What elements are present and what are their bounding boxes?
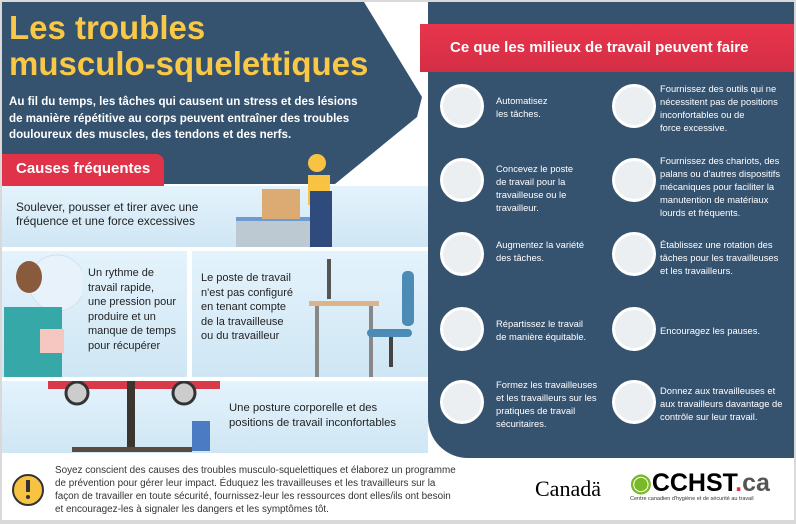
- cause 4 panel: positions de travail inconfortables: [229, 417, 396, 429]
- item: automatisez: Automatisez: [496, 95, 548, 106]
- cause 4 panel: [2, 381, 428, 453]
- cause 2 panel: pour récupérer: [88, 340, 160, 352]
- item: variete: Augmentez la variété: [496, 239, 584, 250]
- title: musculo-squelettiques: [9, 45, 368, 82]
- item: outils: Fournissez des outils qui ne: [660, 83, 776, 94]
- cause 1 panel: [2, 186, 428, 247]
- item: outils: nécessitent pas de positions: [660, 96, 778, 107]
- cause 1 panel: fréquence et une force excessives: [16, 214, 195, 228]
- illustration: worker with box: [236, 154, 332, 247]
- red banner: Ce que les milieux: [420, 24, 794, 72]
- cause 3 panel: [192, 251, 428, 377]
- logo: Canada: Canadä: [535, 476, 601, 501]
- cause 1 panel: Soulever, pousser et tirer avec une: [16, 200, 198, 214]
- footer text: façon de travailler en toute sécurité, fournissez-leur les ressources dont elles/ils ont besoin: [55, 491, 451, 502]
- action items: travailleur.: [496, 202, 539, 213]
- item: automatisez: les tâches.: [496, 108, 541, 119]
- item: repartissez: de manière équitable.: [496, 331, 586, 342]
- right dark panel: [428, 2, 794, 458]
- intro text: douloureux des muscles, des tendons et des nerfs.: [9, 128, 291, 141]
- footer text: et encouragez-les à signaler les dangers et les symptômes tôt.: [55, 504, 329, 515]
- cause 3 panel: en tenant compte: [201, 301, 286, 313]
- item: repartissez: Répartissez le travail: [496, 318, 583, 329]
- intro text: [9, 95, 358, 141]
- icon: warning bubble: [12, 474, 44, 506]
- cause 2 panel: manque de temps: [88, 325, 176, 337]
- logo: CCHST: Centre canadien d'hygiène et de sécurité au travail: [630, 496, 754, 502]
- causes heading: Causes fréquentes: [16, 160, 150, 177]
- item: outils: inconfortables ou de: [660, 109, 744, 120]
- cause 2 panel: produire et un: [88, 310, 156, 322]
- item: controle: contrôle sur leur travail.: [660, 411, 757, 422]
- cause 3 panel: de la travailleuse: [201, 316, 284, 328]
- item: poste: Concevez le poste: [496, 163, 573, 174]
- item: variete: [440, 232, 584, 276]
- illustration: desk: [309, 259, 414, 377]
- cause 3 panel: n'est pas configuré: [201, 286, 293, 298]
- item: outils: [612, 83, 778, 133]
- action items: lourds et fréquents.: [660, 207, 740, 218]
- cause 2 panel: [2, 251, 187, 377]
- cause 2 panel: une pression pour: [88, 296, 176, 308]
- item: poste: [440, 158, 573, 213]
- item: rotation: Établissez une rotation des: [660, 239, 773, 250]
- item: poste: travailleuse ou le: [496, 189, 566, 200]
- footer text: Soyez conscient des causes des troubles musculo-squelettiques et élaborez un programme: [55, 465, 456, 476]
- intro text: de manière répétitive au corps peuvent entraîner des troubles: [9, 112, 349, 124]
- item: formez: [440, 379, 597, 429]
- illustration: nurse: [4, 254, 82, 377]
- item: chariots: [612, 155, 780, 218]
- item: chariots: Fournissez des chariots, des: [660, 155, 779, 166]
- item: automatisez: [440, 84, 548, 128]
- item: variete: des tâches.: [496, 252, 544, 263]
- item: controle: [612, 380, 782, 424]
- item: formez: et les travailleurs sur les: [496, 392, 597, 403]
- cause 4 panel: Une posture corporelle et des: [229, 402, 377, 414]
- item: formez: Formez les travailleuses: [496, 379, 597, 390]
- title: Les troubles: [9, 9, 205, 46]
- red banner: Ce que les milieux: Ce que les milieux de travail peuvent faire: [450, 39, 748, 56]
- item: rotation: [612, 232, 778, 276]
- footer text: de prévention pour gérer leur impact. Éduquez les travailleuses et les travailleurs sur la: [55, 478, 435, 489]
- item: chariots: mécaniques pour faciliter la: [660, 181, 774, 192]
- intro text: Au fil du temps, les tâches qui causent un stress et des lésions: [9, 95, 358, 108]
- cause 2 panel: Un rythme de: [88, 267, 154, 279]
- action items: [440, 83, 782, 429]
- item: poste: de travail pour la: [496, 176, 565, 187]
- cause 3 panel: Le poste de travail: [201, 272, 291, 284]
- cause 3 panel: ou du travailleur: [201, 330, 279, 342]
- item: formez: sécuritaires.: [496, 418, 547, 429]
- header dark background shape: [2, 2, 422, 184]
- item: formez: pratiques de travail: [496, 405, 575, 416]
- item: repartissez: [440, 307, 586, 351]
- causes heading: [2, 154, 164, 186]
- footer text: [55, 465, 456, 515]
- item: pauses: Encouragez les pauses.: [660, 325, 760, 336]
- item: rotation: tâches pour les travailleuses: [660, 252, 778, 263]
- logo: CCHST: ◉CCHST.ca: [630, 469, 770, 497]
- cause 2 panel: travail rapide,: [88, 282, 154, 294]
- item: controle: aux travailleurs davantage de: [660, 398, 782, 409]
- item: controle: Donnez aux travailleuses et: [660, 385, 775, 396]
- item: rotation: et les travailleurs.: [660, 265, 733, 276]
- item: chariots: palans ou d'autres dispositifs: [660, 168, 780, 179]
- illustration: car lift: [48, 381, 220, 452]
- item: outils: force excessive.: [660, 122, 727, 133]
- item: chariots: manutention de matériaux: [660, 194, 768, 205]
- title: [9, 9, 368, 82]
- item: pauses: [612, 307, 760, 351]
